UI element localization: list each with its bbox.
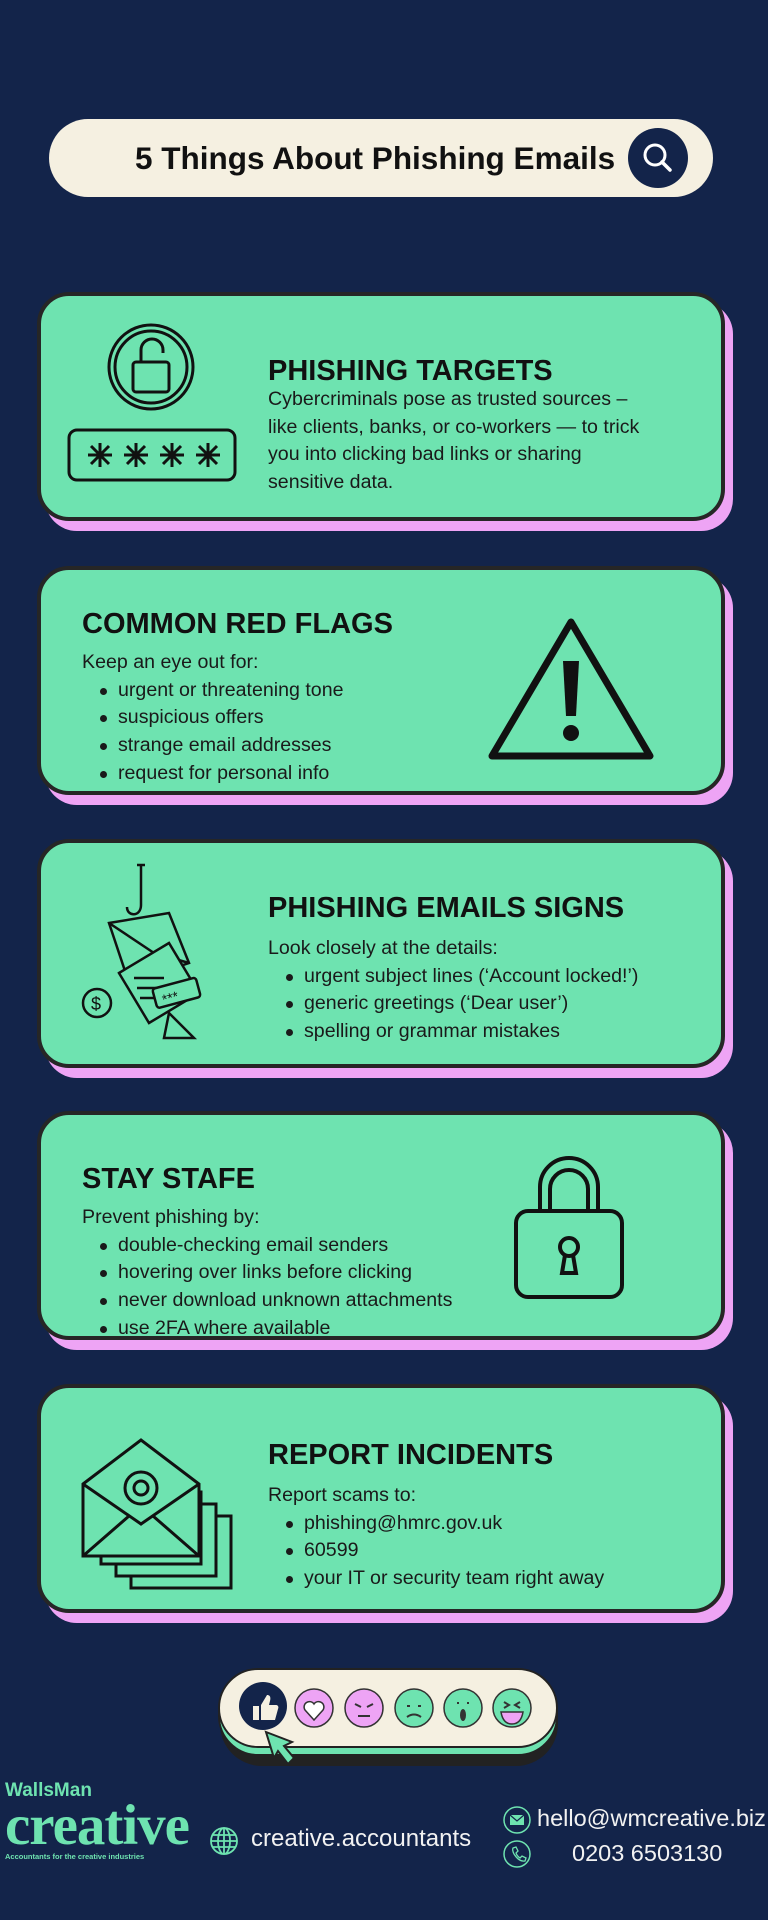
body text bbox=[268, 388, 640, 493]
body list: use 2FA where available bbox=[118, 1317, 330, 1339]
footer: contact bbox=[503, 1805, 766, 1868]
icon: lock and password bbox=[68, 324, 236, 482]
icons: reactions bbox=[239, 1682, 532, 1730]
body list bbox=[82, 1206, 452, 1339]
body list: request for personal info bbox=[118, 762, 329, 784]
heading: COMMON RED FLAGS bbox=[82, 608, 393, 640]
panel: stay safe bbox=[37, 1111, 733, 1350]
body list: urgent or threatening tone bbox=[118, 679, 344, 701]
body list: spelling or grammar mistakes bbox=[304, 1020, 560, 1042]
heading: PHISHING TARGETS bbox=[268, 355, 553, 387]
body list: phishing@hmrc.gov.uk bbox=[304, 1512, 502, 1534]
body text: Cybercriminals pose as trusted sources – bbox=[268, 388, 627, 410]
body list: 60599 bbox=[304, 1539, 358, 1561]
body list bbox=[268, 1484, 604, 1589]
icon: emails with virus bbox=[82, 1438, 232, 1590]
body list bbox=[268, 937, 638, 1042]
body list: Keep an eye out for: bbox=[82, 651, 258, 673]
title text: 5 Things About Phishing Emails bbox=[135, 140, 615, 176]
body list: never download unknown attachments bbox=[118, 1289, 452, 1311]
icon: warning bbox=[488, 618, 654, 760]
body list: Report scams to: bbox=[268, 1484, 416, 1506]
footer: website: creative.accountants bbox=[251, 1825, 471, 1852]
body list: urgent subject lines (‘Account locked!’) bbox=[304, 965, 638, 987]
body list: hovering over links before clicking bbox=[118, 1261, 412, 1283]
body list: double-checking email senders bbox=[118, 1234, 388, 1256]
icon: cursor arrow bbox=[264, 1730, 294, 1762]
footer: contact: hello@wmcreative.biz bbox=[537, 1805, 766, 1831]
footer: logo: WallsMan bbox=[5, 1780, 92, 1801]
body list: your IT or security team right away bbox=[304, 1567, 604, 1589]
body list: suspicious offers bbox=[118, 706, 264, 728]
reaction bar bbox=[218, 1668, 558, 1766]
body text: you into clicking bad links or sharing bbox=[268, 443, 582, 465]
body list: Look closely at the details: bbox=[268, 937, 498, 959]
heading: REPORT INCIDENTS bbox=[268, 1439, 553, 1471]
title pill bbox=[49, 119, 713, 197]
panel: phishing targets bbox=[37, 292, 733, 531]
panel: report incidents bbox=[37, 1384, 733, 1623]
panel: phishing email signs bbox=[37, 839, 733, 1078]
footer: logo: Accountants for the creative industries bbox=[5, 1852, 144, 1861]
icon: hooked email bbox=[82, 864, 202, 1040]
body text: like clients, banks, or co-workers — to trick bbox=[268, 416, 639, 438]
icon: padlock bbox=[514, 1156, 624, 1299]
footer: contact: 0203 6503130 bbox=[572, 1840, 722, 1866]
heading: STAY STAFE bbox=[82, 1163, 255, 1195]
body list bbox=[82, 651, 344, 784]
body list: strange email addresses bbox=[118, 734, 331, 756]
panel: common red flags bbox=[37, 566, 733, 805]
heading: PHISHING EMAILS SIGNS bbox=[268, 892, 624, 924]
body text: sensitive data. bbox=[268, 471, 393, 493]
footer: logo: creative bbox=[5, 1794, 189, 1857]
icon: hooked email: *** bbox=[160, 988, 181, 1008]
icon: search bbox=[628, 128, 688, 188]
body list: Prevent phishing by: bbox=[82, 1206, 260, 1228]
body list: generic greetings (‘Dear user’) bbox=[304, 992, 568, 1014]
icon: hooked email: $ bbox=[91, 994, 101, 1014]
